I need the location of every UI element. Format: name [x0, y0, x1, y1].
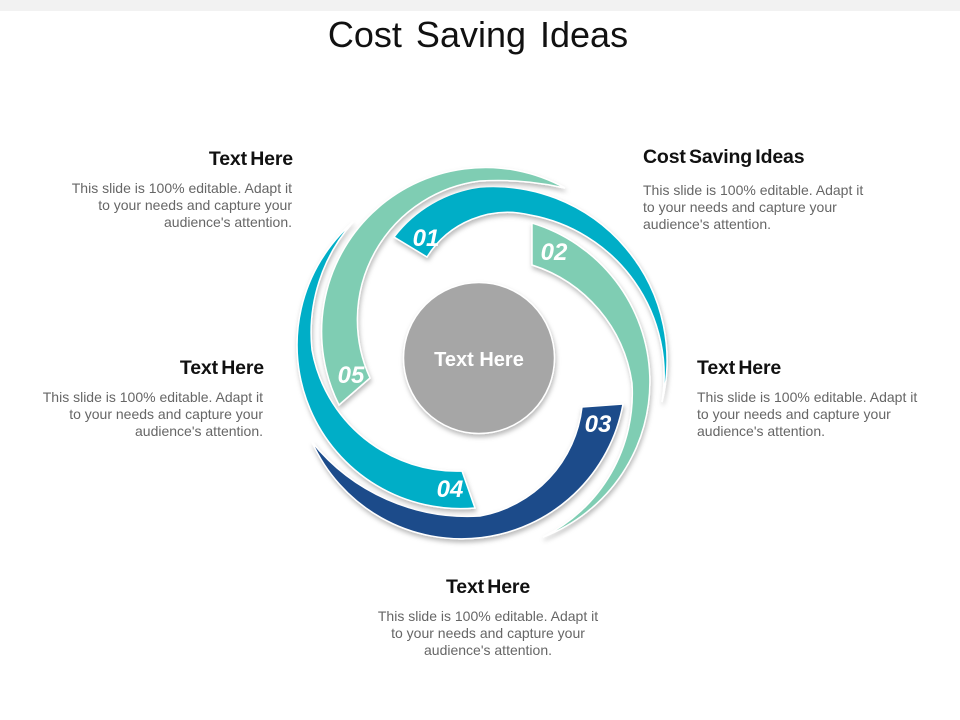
text block: right: to your needs and capture your	[697, 406, 891, 422]
label 01: 01	[413, 225, 439, 252]
arm 04 teal	[297, 222, 475, 509]
text block: right: This slide is 100% editable. Adapt it	[697, 389, 917, 405]
arm 03 navy	[312, 404, 623, 539]
title: Cost Saving Ideas	[328, 14, 628, 55]
label 03: 03	[585, 411, 612, 438]
text block: top left: This slide is 100% editable. Adapt it	[72, 180, 292, 196]
text block: bottom: Text Here	[446, 576, 530, 598]
top bar	[0, 0, 960, 11]
text block: left: audience's attention.	[135, 423, 263, 439]
text block: top left: audience's attention.	[164, 214, 292, 230]
text block: top right: audience's attention.	[643, 216, 771, 232]
text block: bottom	[378, 576, 598, 658]
text block: top right: to your needs and capture your	[643, 199, 837, 215]
text block: right	[697, 357, 918, 439]
text block: right: Text Here	[697, 357, 781, 379]
text block: top right	[643, 146, 864, 232]
arm 01 teal	[394, 187, 667, 402]
text block: top left: to your needs and capture your	[98, 197, 292, 213]
text block: bottom: This slide is 100% editable. Adapt it	[378, 608, 598, 624]
text block: top left	[72, 148, 293, 230]
text block: left: This slide is 100% editable. Adapt it	[43, 389, 263, 405]
text block: left: Text Here	[180, 357, 264, 379]
label 02: 02	[541, 239, 568, 266]
arm 02 green	[532, 223, 650, 537]
arm 05 green	[322, 168, 565, 405]
centre circle	[404, 282, 554, 434]
text block: top right: This slide is 100% editable. Adapt it	[643, 182, 863, 198]
centre label: Text Here	[434, 349, 524, 371]
text block: left	[43, 357, 264, 439]
text block: left: to your needs and capture your	[69, 406, 263, 422]
text block: bottom: to your needs and capture your	[391, 625, 585, 641]
label 05: 05	[338, 362, 365, 389]
text block: bottom: audience's attention.	[424, 642, 552, 658]
text block: top left: Text Here	[209, 148, 293, 170]
label 04: 04	[437, 476, 463, 503]
text block: top right: Cost Saving Ideas	[643, 146, 804, 168]
text block: right: audience's attention.	[697, 423, 825, 439]
